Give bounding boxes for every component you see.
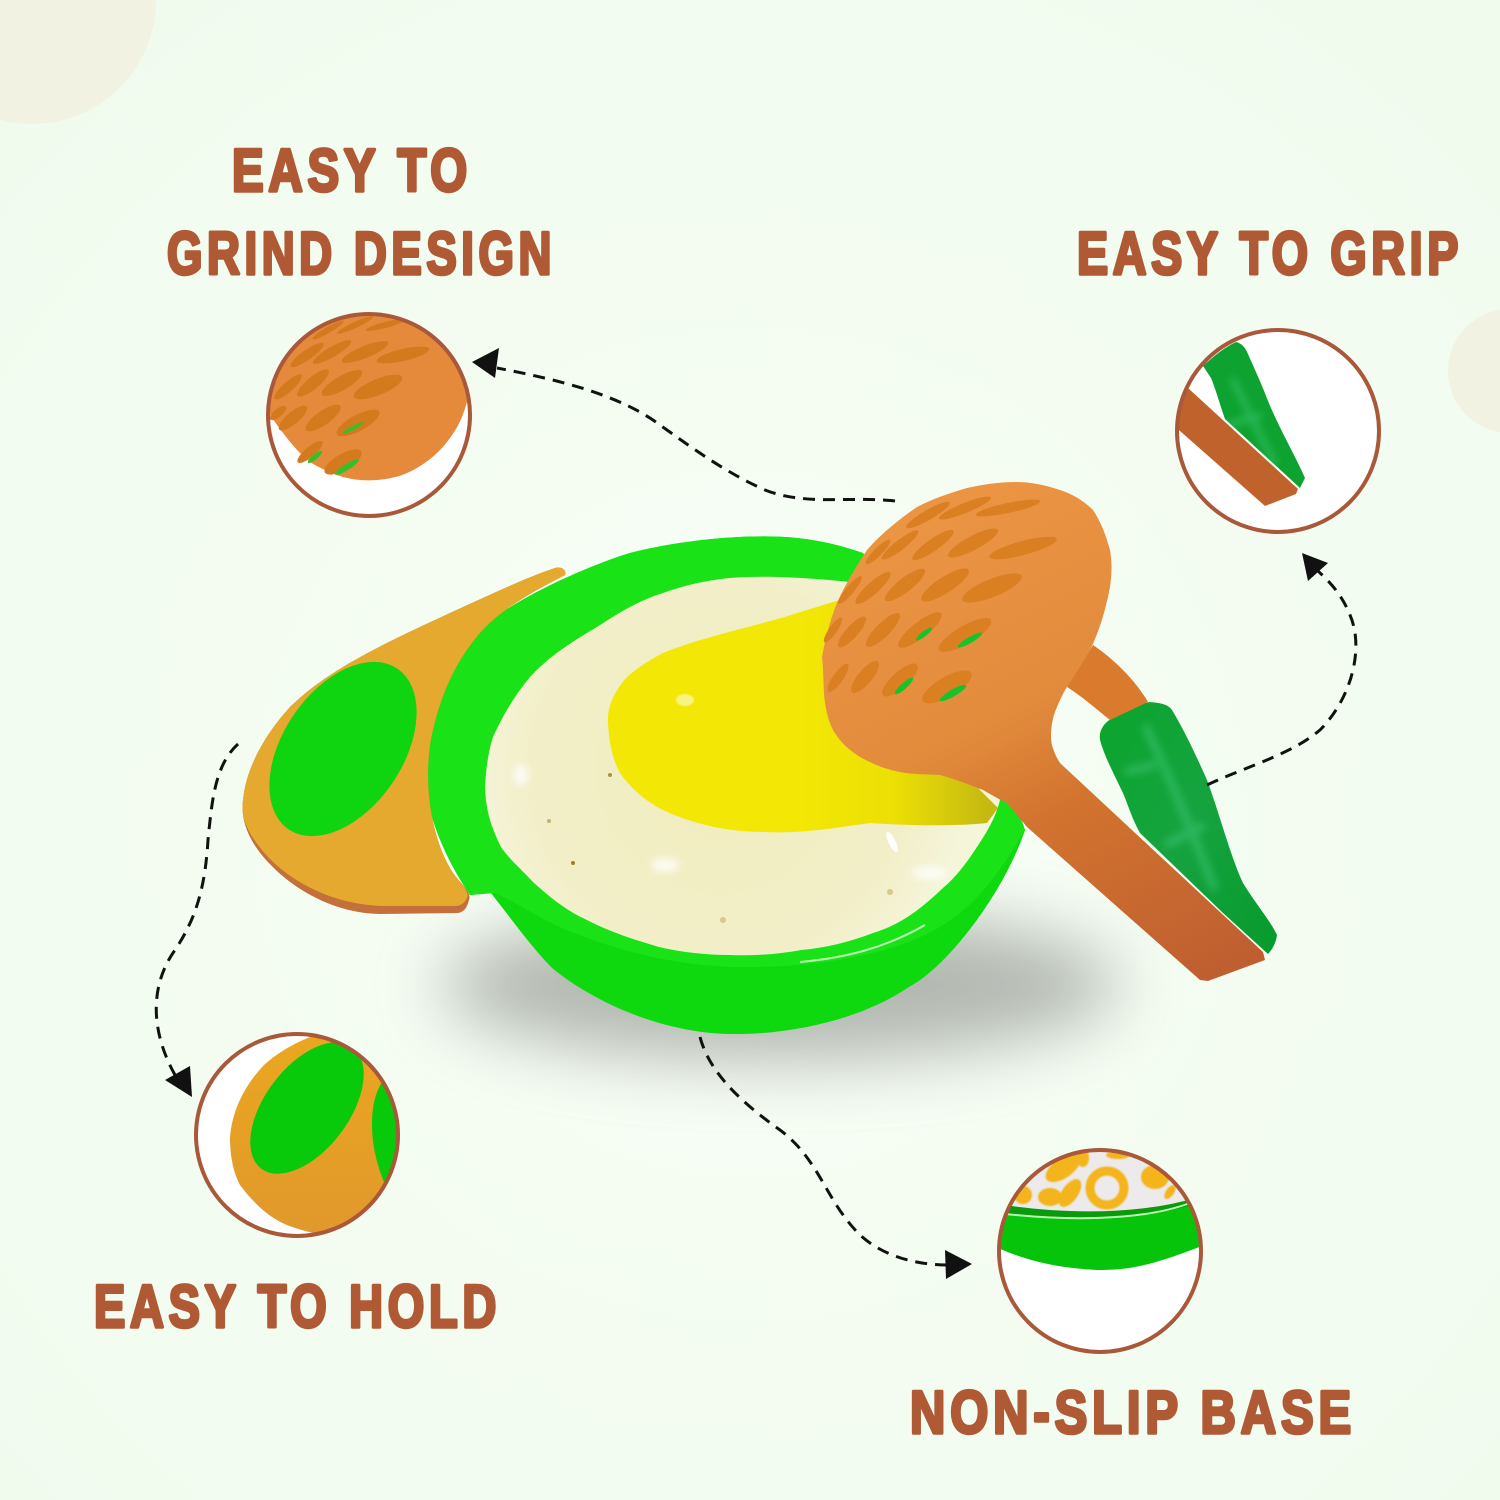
detail circle: hold [196, 1022, 402, 1240]
bowl rim [424, 536, 1025, 967]
detail circle: grind design [266, 312, 472, 518]
decorative corner circle [0, 0, 156, 124]
decorative right circle [1448, 309, 1500, 433]
food highlights [514, 694, 948, 923]
rim highlight [800, 925, 925, 962]
detail circle: grip [1170, 330, 1379, 532]
masher grip [1100, 702, 1277, 954]
title: non-slip base: NON-SLIP BASE [910, 1379, 1356, 1446]
masher head and arm [822, 482, 1265, 981]
dashed arrow: to grind detail [472, 348, 895, 501]
dashed arrow: to hold detail [156, 744, 238, 1097]
masher neck [1067, 645, 1148, 720]
title: easy to grind design [167, 137, 556, 287]
bowl body [424, 536, 1025, 1034]
handle [239, 567, 565, 914]
title: easy to grind design: GRIND DESIGN [167, 220, 556, 287]
product: bowl with masher [239, 482, 1277, 1060]
dashed arrow: to grip detail [1207, 553, 1356, 785]
food: cream puree [485, 577, 1000, 955]
dashed arrow: to base detail [700, 1037, 972, 1279]
food: yellow puree [608, 600, 998, 832]
title: easy to grind design: EASY TO [232, 137, 472, 204]
title: easy to hold: EASY TO HOLD [94, 1273, 501, 1340]
detail circle: non-slip base [998, 1148, 1202, 1352]
masher slits [821, 493, 1059, 710]
handle green grip [239, 635, 447, 863]
bowl shadow [440, 910, 1120, 1060]
